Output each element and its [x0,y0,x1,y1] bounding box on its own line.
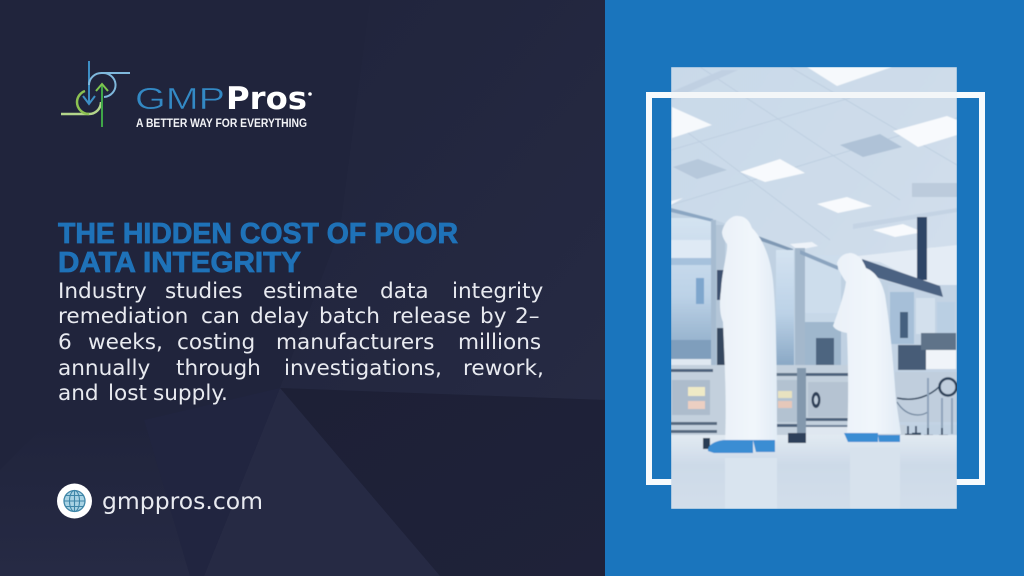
body text: estimate [263,279,358,304]
body text: remediation [58,304,188,329]
icon: globe [57,484,92,518]
machinery: cabinets [671,208,957,440]
dark pipe [862,259,943,297]
logo [61,61,312,130]
logo wordmark bold: Pros [226,81,307,117]
body text: by [480,304,507,329]
panel: blue background [605,0,1024,576]
ceiling column [917,217,927,280]
body text: Industry [58,279,147,304]
logo registered mark [308,92,312,96]
body text: costing [177,330,255,355]
body text [58,279,544,406]
body text: lost [108,381,147,406]
shoes: right operator [844,433,900,442]
body text: rework, [463,356,544,381]
person: right operator [833,253,901,442]
body text: release [392,304,471,329]
body text: data [380,279,429,304]
body text: manufacturers [276,330,434,355]
body text: and [58,381,99,406]
ceiling [671,67,957,286]
person: left operator [708,216,777,453]
white frame: behind photo [646,92,985,485]
photo: cleanroom [671,67,957,509]
shoes: left operator [708,440,775,453]
machinery: lower panels [671,364,848,436]
back wall [858,246,957,286]
machinery: right side [888,285,957,436]
website link [57,484,263,518]
body text: through [176,356,261,381]
heading: DATA INTEGRITY [58,247,301,279]
panel: dark navy background [0,0,605,576]
website text: gmppros.com [102,489,263,515]
body text: investigations, [284,356,442,381]
logo wordmark: GMP [135,81,225,116]
icon: logo arrows [61,61,130,127]
logo tagline: A BETTER WAY FOR EVERYTHING [136,118,307,130]
white frame: top edge over photo [671,92,957,98]
body text: can [201,304,240,329]
floor [671,433,957,509]
body text: integrity [452,279,543,304]
body text: delay [250,304,309,329]
body text: 2– [515,304,540,329]
body text: studies [165,279,243,304]
heading: THE HIDDEN COST OF POOR [58,218,458,250]
body text: 6 [58,330,72,355]
body text: supply. [153,381,228,406]
body text: millions [458,330,541,355]
body text: batch [319,304,380,329]
body text: annually [58,356,151,381]
heading [58,218,458,279]
body text: weeks, [88,330,163,355]
